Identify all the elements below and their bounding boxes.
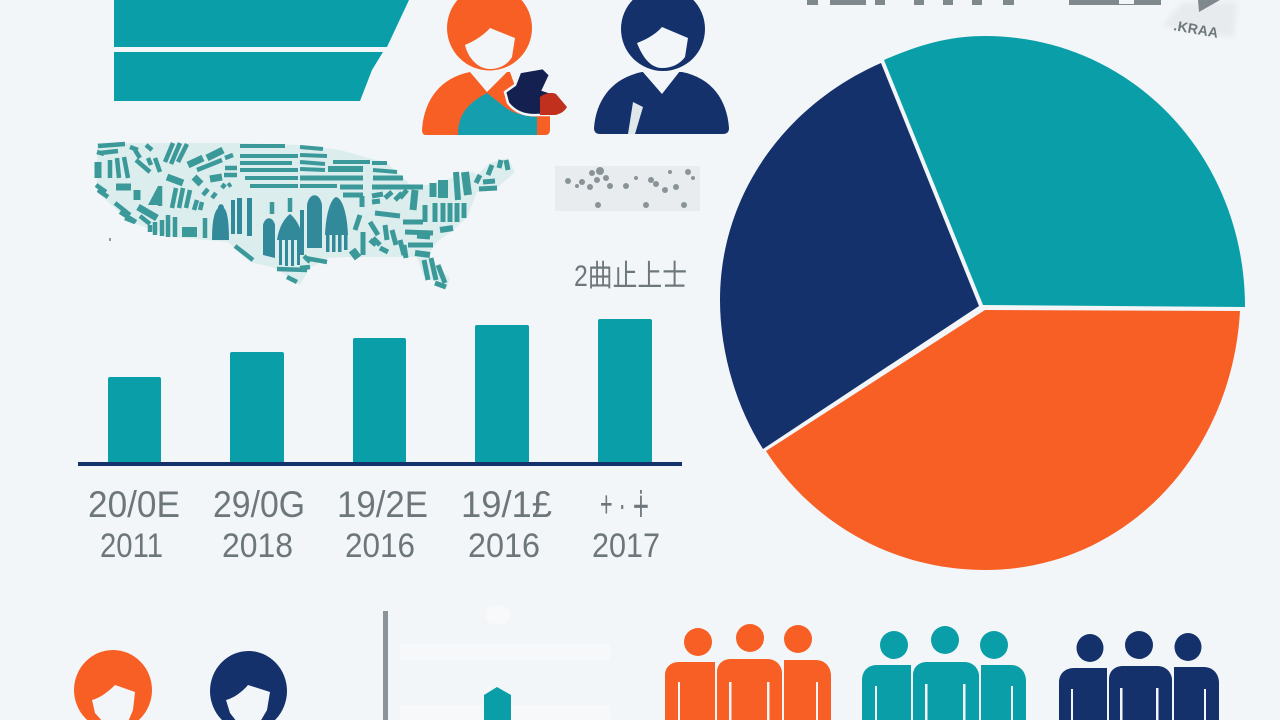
axis labels: 19/1£ (461, 484, 552, 525)
pie slice: navy (720, 63, 979, 449)
map stripes: east (352, 160, 508, 287)
chart title label: 2曲止上士 (574, 260, 687, 293)
map stray mark (109, 238, 111, 241)
banner: teal header ribbons (114, 0, 409, 101)
map block (182, 227, 197, 237)
small teal bar (484, 687, 511, 720)
map: striped United States (96, 143, 515, 288)
axis labels: 2016 (345, 527, 415, 565)
people group: navy (1059, 631, 1219, 720)
bar 2016b (475, 325, 529, 463)
legend: garbled dotted box (555, 166, 700, 211)
axis labels: 19/2E (337, 484, 428, 525)
pie chart (720, 36, 1245, 570)
icon: navy person (594, 0, 729, 134)
people group: teal (862, 626, 1026, 720)
axis labels: 20/0E (88, 484, 180, 525)
axis labels: 2011 (100, 527, 163, 565)
divider line (383, 611, 388, 720)
map stripes: west (96, 143, 327, 282)
top-right garbled text strip (807, 0, 1161, 5)
map stripes: centre (240, 146, 423, 207)
icon: orange person with heart (422, 0, 567, 135)
axis labels: 29/0G (213, 484, 305, 525)
map silhouettes: crowd (212, 195, 348, 266)
axis labels: 2017 (592, 527, 660, 565)
faint bar chart (400, 606, 610, 720)
note card: tilted tag (1162, 0, 1238, 41)
bar 2016 (353, 338, 406, 463)
axis labels: 2018 (222, 527, 293, 565)
axis labels: + · ∔ (600, 484, 650, 525)
bar 2018 (230, 352, 284, 463)
icon: navy head bottom (210, 651, 287, 720)
chart axis (78, 462, 682, 466)
note card: tilted tag: .KRAA (1172, 17, 1220, 41)
bar 2011 (108, 377, 161, 463)
axis labels (88, 484, 660, 565)
pie slice: orange (766, 310, 1240, 570)
axis labels: 2016 (468, 527, 540, 565)
bar 2017 (598, 319, 652, 463)
people group: orange (665, 624, 831, 720)
bar chart (78, 319, 682, 466)
pie slice: teal (884, 36, 1245, 307)
icon: orange head bottom (74, 650, 152, 720)
